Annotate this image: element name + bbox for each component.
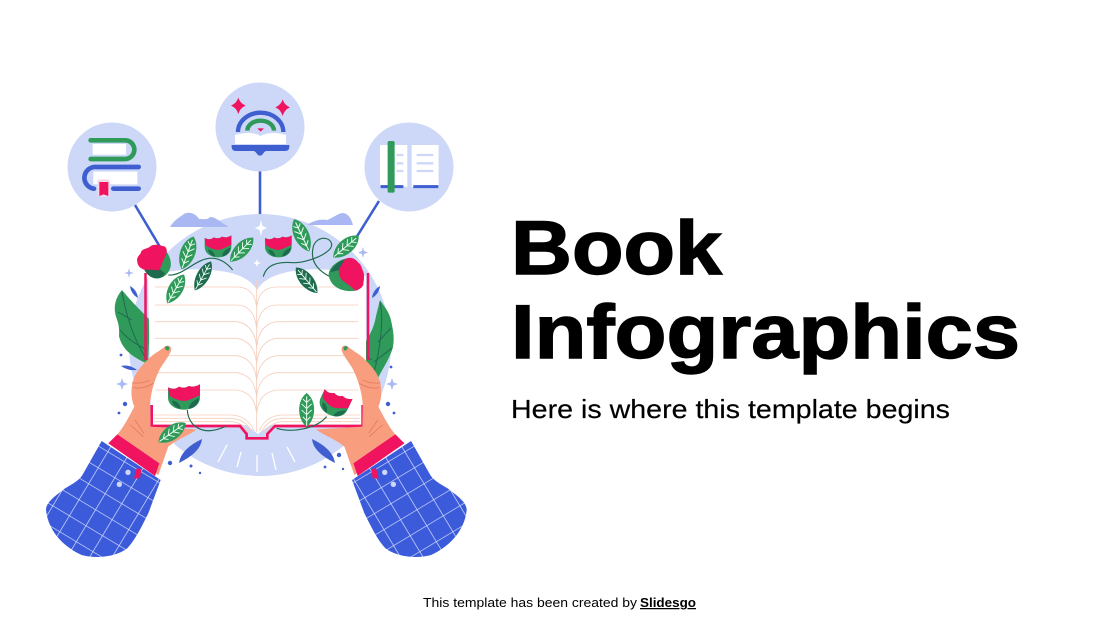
open book (146, 269, 368, 438)
title: Infographics (511, 290, 1020, 375)
icon: open book with bookmark (364, 122, 454, 212)
icon: stacked books (68, 122, 156, 212)
footer credit: This template has been created by (423, 596, 638, 610)
connector lines (135, 171, 379, 247)
leaf: right large (355, 300, 394, 378)
clouds (170, 213, 353, 227)
background circle (129, 214, 391, 476)
footer credit: Slidesgo (640, 596, 696, 610)
icon: rainbow over book (216, 82, 304, 172)
leaf: left large (115, 290, 150, 364)
vines, leaves and flowers: bottom (154, 384, 353, 448)
vines, leaves and flowers: top (137, 216, 364, 307)
title: Book (511, 206, 723, 291)
subtitle: Here is where this template begins (511, 394, 950, 424)
hand and sleeve: left (46, 346, 197, 557)
hand and sleeve: right (316, 346, 467, 557)
title (511, 206, 1020, 375)
decorations: sparkles, dots and sunburst (116, 220, 398, 474)
